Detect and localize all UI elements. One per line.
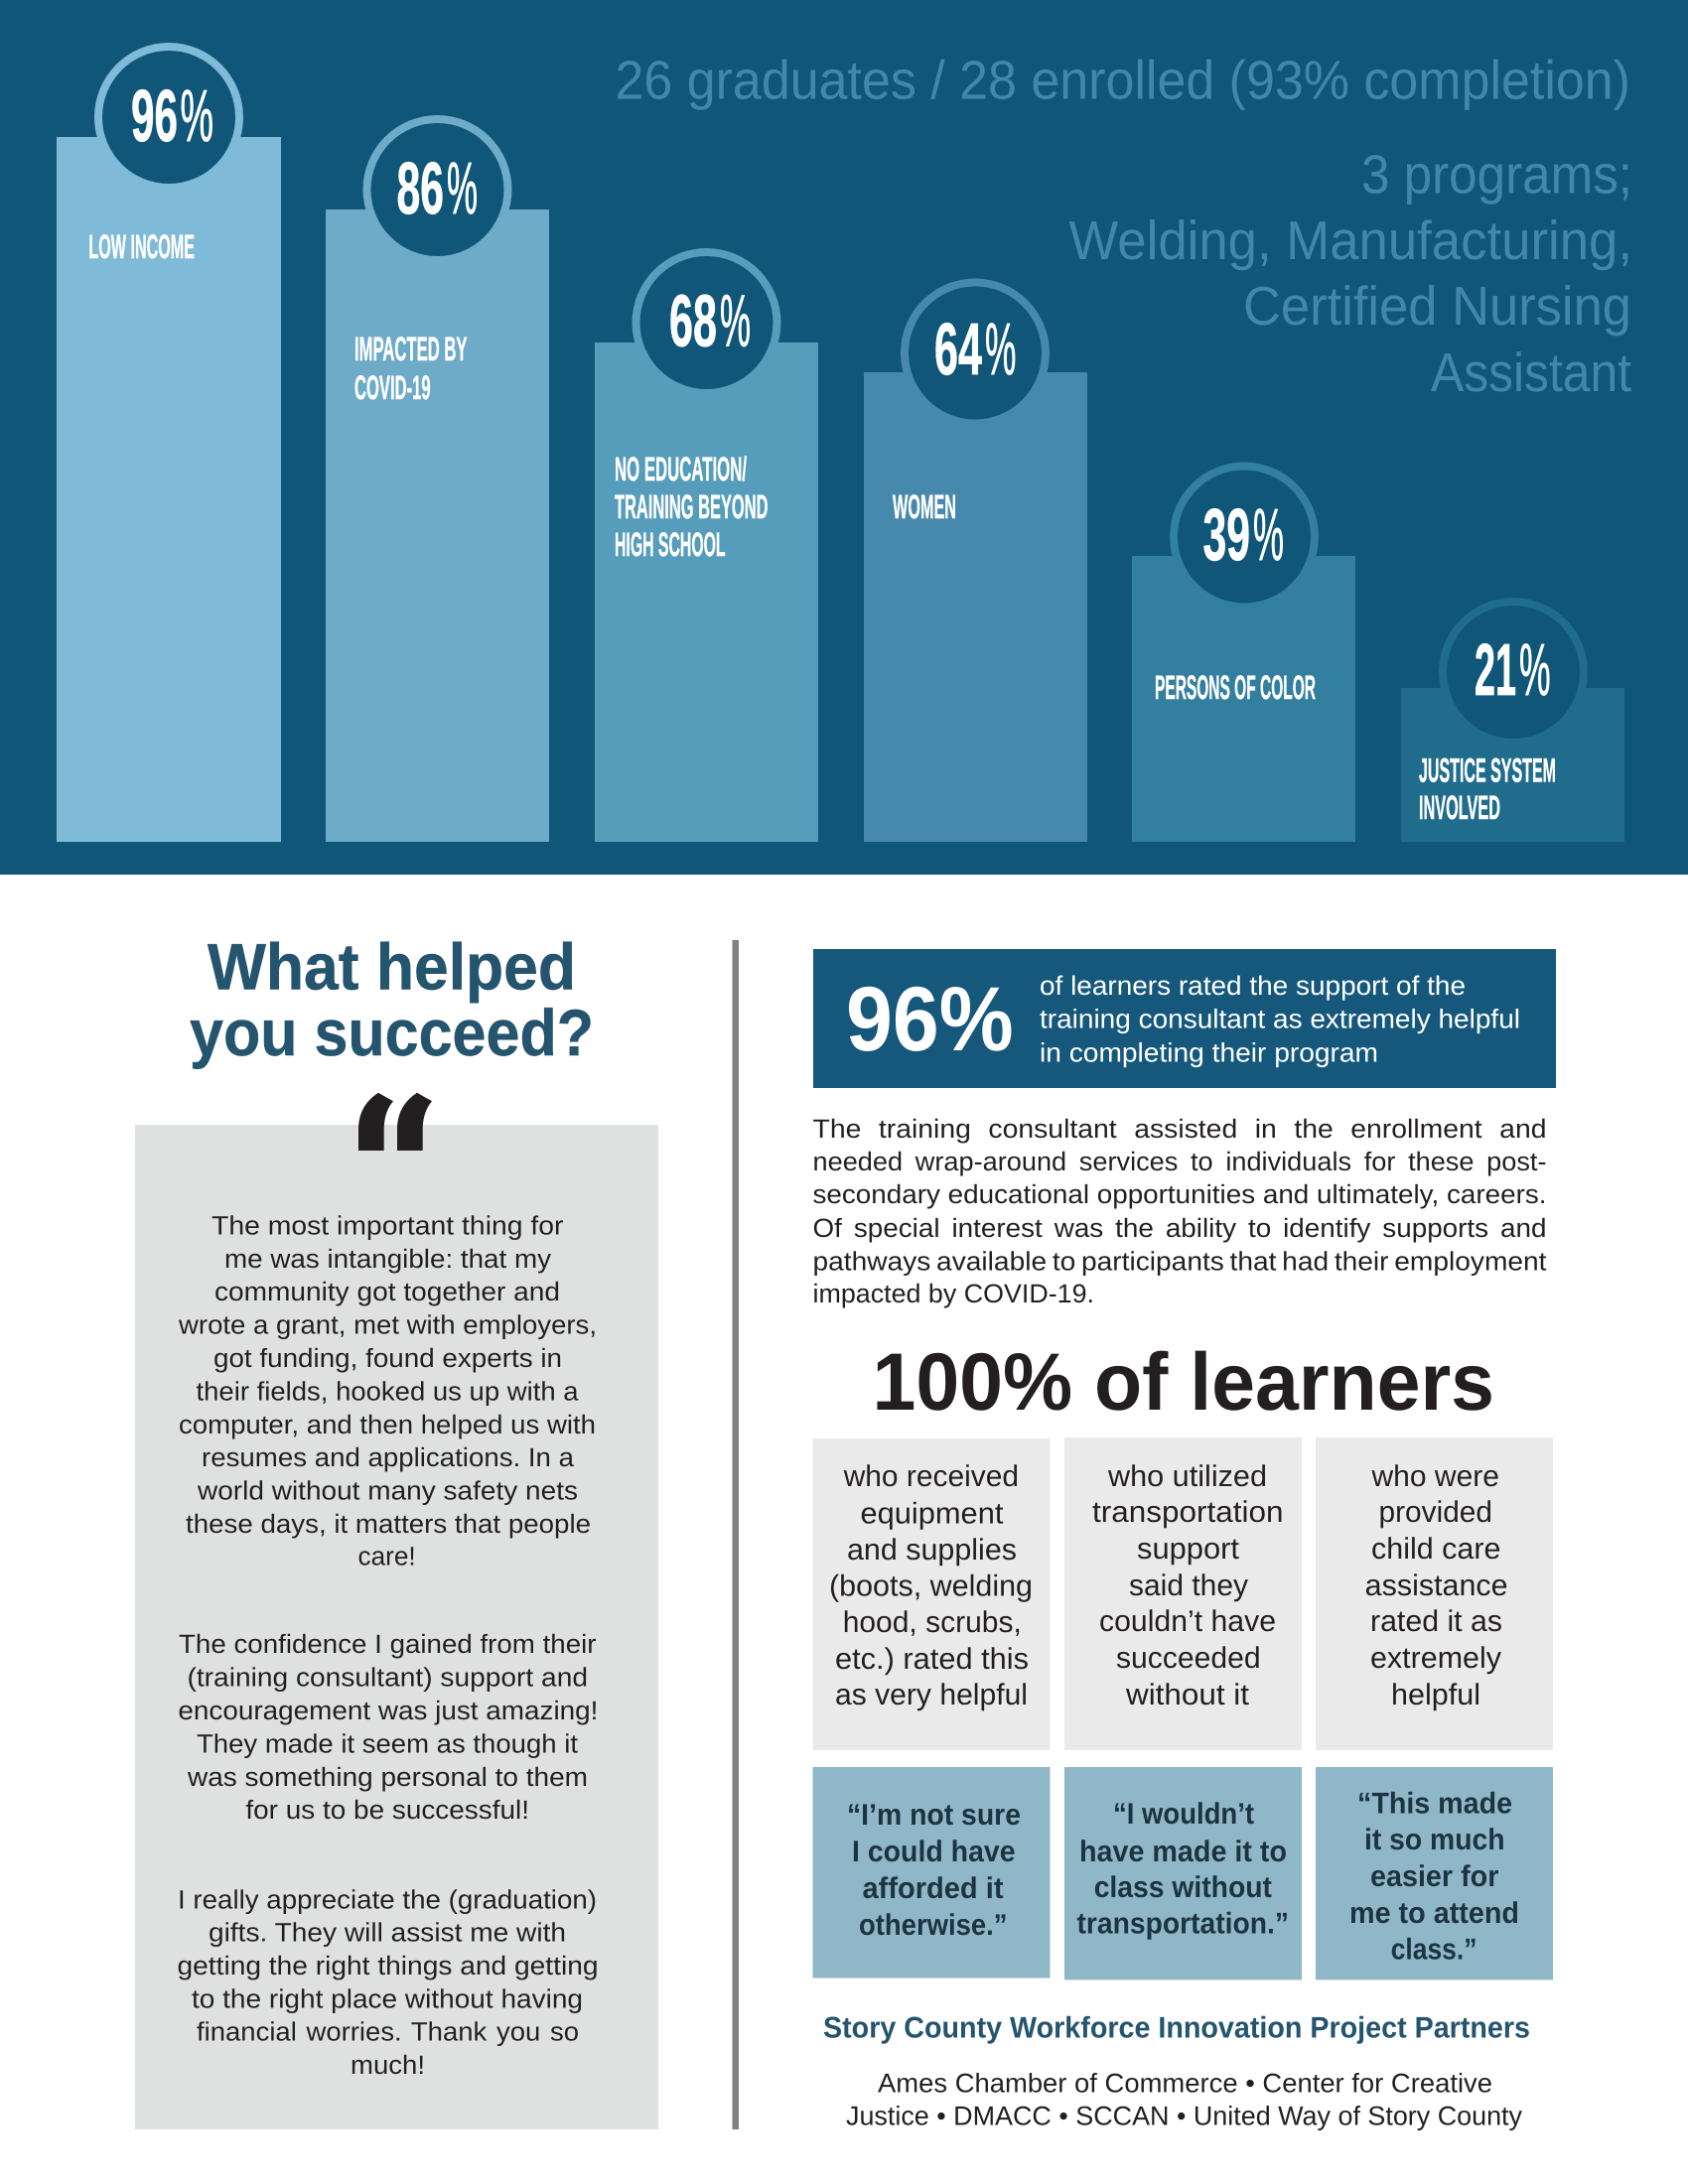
card: child care assistance: provided <box>1378 1496 1492 1529</box>
bar: no education beyond high school 68%: TRAINING BEYOND <box>615 488 769 526</box>
text: first testimonial: these days, it matters that people <box>186 1509 591 1539</box>
card: transportation support: couldn’t have <box>1099 1605 1276 1638</box>
bar: no education beyond high school 68%: 68 <box>669 280 717 361</box>
text: training consultant description: impacted by COVID-19. <box>812 1279 1094 1308</box>
heading: project partners: Story County Workforce Innovation Project Partners <box>823 2011 1530 2045</box>
bar: no education beyond high school 68%: % <box>720 280 751 361</box>
card: child care assistance: assistance <box>1365 1570 1508 1602</box>
quote card: made it to class: “I wouldn’t <box>1113 1798 1254 1831</box>
card: child care assistance: who were <box>1370 1460 1499 1493</box>
card: transportation support: transportation <box>1092 1496 1283 1529</box>
text: third testimonial: getting the right things and getting <box>177 1951 598 1980</box>
heading: what helped you succeed: you succeed? <box>190 996 594 1069</box>
heading: completion stat: 26 graduates / 28 enrolled (93% completion) <box>616 50 1630 111</box>
bar: justice system involved 21%: 21 <box>1475 628 1516 711</box>
card: equipment and supplies: who received <box>843 1460 1019 1493</box>
text: training consultant description: The training consultant assisted in the enrollment and <box>812 1114 1547 1144</box>
bar: women 64%: % <box>985 308 1016 390</box>
card: child care assistance: helpful <box>1391 1679 1480 1711</box>
card: equipment and supplies <box>812 1438 1051 1750</box>
text: partners list: Ames Chamber of Commerce • Center for Creative <box>878 2069 1492 2099</box>
text: first testimonial: resumes and applications. In a <box>202 1442 574 1472</box>
text: partners list <box>846 2069 1522 2130</box>
text: first testimonial: community got together and <box>214 1277 560 1306</box>
text: third testimonial: much! <box>351 2050 425 2080</box>
callout: 96% rated support helpful: 96% <box>846 969 1014 1070</box>
text: second testimonial: encouragement was just amazing! <box>178 1696 598 1725</box>
text: training consultant description <box>812 1114 1547 1308</box>
bar: impacted by COVID-19 86%: % <box>447 147 478 229</box>
text: second testimonial: was something personal to them <box>187 1762 588 1792</box>
text: training consultant description: Of special interest was the ability to identify supports and <box>812 1213 1547 1243</box>
bar: women 64%: 64 <box>934 308 982 390</box>
quote card: easier to attend: class.” <box>1391 1934 1477 1967</box>
text: first testimonial <box>178 1211 597 1570</box>
heading: 100% of learners: 100% of learners <box>872 1337 1494 1428</box>
card: equipment and supplies: as very helpful <box>835 1679 1028 1711</box>
text: first testimonial: me was intangible: that my <box>224 1244 552 1274</box>
heading: programs list: 3 programs; <box>1361 143 1632 205</box>
text: training consultant description: needed wrap-around services to individuals for these post- <box>812 1147 1547 1176</box>
bar: low income 96%: % <box>181 74 213 157</box>
text: partners list: Justice • DMACC • SCCAN • United Way of Story County <box>846 2101 1522 2130</box>
heading: programs list <box>1068 143 1632 403</box>
text: first testimonial: wrote a grant, met with employers, <box>178 1310 597 1340</box>
bar: no education beyond high school 68% <box>595 248 818 842</box>
text: second testimonial: They made it seem as though it <box>197 1729 579 1759</box>
text: training consultant description: secondary educational opportunities and ultimately, careers. <box>812 1179 1547 1209</box>
quote card: afforded it <box>812 1767 1051 1978</box>
text: second testimonial: (training consultant) support and <box>187 1662 588 1692</box>
panel: demographics header <box>0 0 1688 875</box>
bar: persons of color 39%: % <box>1253 493 1284 576</box>
text: third testimonial: gifts. They will assist me with <box>209 1918 566 1948</box>
text: third testimonial: to the right place without having <box>192 1983 583 2013</box>
bar: no education beyond high school 68%: NO EDUCATION/ <box>615 451 747 488</box>
text: third testimonial: I really appreciate the (graduation) <box>178 1884 597 1914</box>
text: second testimonial <box>178 1629 598 1825</box>
text: first testimonial: their fields, hooked us up with a <box>197 1376 579 1406</box>
heading: programs list: Certified Nursing <box>1243 275 1631 337</box>
quote card: easier to attend: “This made <box>1357 1787 1512 1821</box>
card: child care assistance: child care <box>1371 1533 1501 1566</box>
card: child care assistance <box>1316 1437 1553 1750</box>
panel: testimonials <box>135 1093 658 2129</box>
text: training consultant description: pathways available to participants that had their employment <box>812 1247 1547 1277</box>
bar: persons of color 39% <box>1132 463 1355 842</box>
callout: 96% rated support helpful: of learners rated the support of the <box>1040 971 1466 1001</box>
quote card: made it to class: transportation.” <box>1076 1908 1289 1941</box>
bar: low income 96%: 96 <box>131 74 178 157</box>
quote card: easier to attend <box>1316 1767 1553 1979</box>
card: equipment and supplies: (boots, welding <box>829 1570 1033 1602</box>
text: first testimonial: computer, and then helped us with <box>179 1410 596 1439</box>
quote card: made it to class: class without <box>1094 1871 1272 1904</box>
bar: women 64% <box>864 278 1087 842</box>
bar: justice system involved 21% <box>1401 598 1624 842</box>
bar: justice system involved 21%: INVOLVED <box>1419 789 1500 827</box>
bar: impacted by COVID-19 86%: 86 <box>397 147 444 229</box>
card: equipment and supplies: hood, scrubs, <box>843 1606 1022 1639</box>
bar: justice system involved 21%: % <box>1519 628 1551 711</box>
text: first testimonial: world without many safety nets <box>197 1475 578 1505</box>
icon: quotation mark <box>358 1093 432 1151</box>
callout: 96% rated support helpful <box>813 949 1556 1088</box>
bar: impacted by COVID-19 86% <box>326 115 549 842</box>
card: child care assistance: extremely <box>1370 1642 1501 1675</box>
card: transportation support: without it <box>1125 1679 1250 1711</box>
card: transportation support: support <box>1137 1533 1240 1566</box>
text: third testimonial: financial worries. Thank you so <box>197 2017 579 2047</box>
quote card: afforded it: otherwise.” <box>859 1909 1007 1942</box>
card: equipment and supplies: etc.) rated this <box>835 1643 1029 1676</box>
quote card: made it to class: have made it to <box>1079 1836 1287 1868</box>
card: transportation support: said they <box>1129 1570 1248 1602</box>
quote card: afforded it: afforded it <box>862 1872 1003 1905</box>
text: second testimonial: for us to be successful! <box>245 1795 529 1825</box>
card: child care assistance: rated it as <box>1370 1605 1502 1638</box>
text: third testimonial <box>177 1884 598 2080</box>
bar: persons of color 39%: PERSONS OF COLOR <box>1155 669 1316 707</box>
bar: women 64%: WOMEN <box>893 488 956 526</box>
card: transportation support <box>1064 1437 1302 1750</box>
card: transportation support: who utilized <box>1107 1460 1267 1493</box>
quote card: afforded it: “I’m not sure <box>847 1799 1021 1832</box>
quote card: easier to attend: easier for <box>1370 1860 1499 1893</box>
callout: 96% rated support helpful: in completing their program <box>1040 1038 1378 1068</box>
text: second testimonial: The confidence I gained from their <box>179 1629 597 1659</box>
card: equipment and supplies: and supplies <box>847 1534 1017 1567</box>
quote card: made it to class <box>1064 1767 1302 1979</box>
heading: what helped you succeed: What helped <box>208 930 576 1004</box>
text: first testimonial: care! <box>357 1541 416 1570</box>
bar: low income 96%: LOW INCOME <box>88 228 195 266</box>
text: first testimonial: The most important thing for <box>211 1211 564 1241</box>
heading: what helped you succeed <box>190 930 594 1069</box>
quote card: easier to attend: me to attend <box>1349 1897 1519 1930</box>
heading: programs list: Assistant <box>1431 341 1631 403</box>
bar: impacted by COVID-19 86%: COVID-19 <box>354 369 431 407</box>
text: first testimonial: got funding, found experts in <box>213 1343 562 1373</box>
bar: low income 96% <box>57 43 281 842</box>
bar: impacted by COVID-19 86%: IMPACTED BY <box>354 331 468 368</box>
quote card: afforded it: I could have <box>852 1836 1016 1868</box>
card: transportation support: succeeded <box>1116 1642 1261 1675</box>
callout: 96% rated support helpful: training consultant as extremely helpful <box>1040 1004 1520 1033</box>
bar: persons of color 39%: 39 <box>1203 493 1250 576</box>
quote card: easier to attend: it so much <box>1364 1824 1505 1856</box>
heading: programs list: Welding, Manufacturing, <box>1068 209 1632 271</box>
card: equipment and supplies: equipment <box>860 1497 1004 1530</box>
bar: no education beyond high school 68%: HIGH SCHOOL <box>615 526 726 564</box>
